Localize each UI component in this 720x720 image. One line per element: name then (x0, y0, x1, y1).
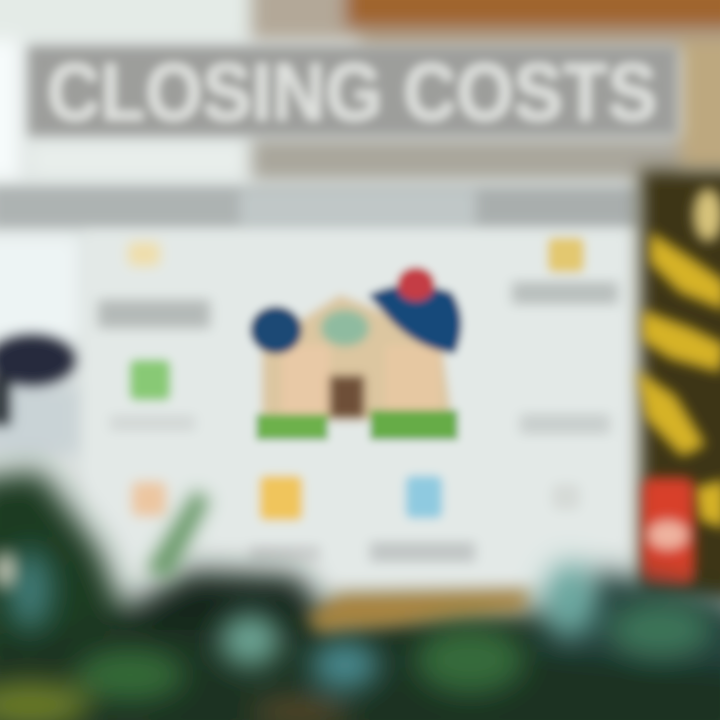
icon: top right yellow marker (548, 238, 584, 272)
text block: lower left label (250, 545, 320, 561)
title: CLOSING COSTS (47, 47, 657, 138)
icon: yellow square (260, 476, 302, 520)
right side: yellow and dark plant (636, 170, 720, 600)
roof right (368, 285, 462, 354)
text block: top left label (98, 300, 210, 328)
text block: top right label (512, 282, 618, 304)
text block: middle left label (110, 415, 195, 431)
title banner (28, 46, 678, 138)
lawn left (256, 414, 328, 440)
text block: middle right label (520, 414, 610, 434)
chimney (397, 267, 435, 301)
icon: green square (130, 360, 170, 400)
house walls (262, 295, 452, 420)
roof left (250, 306, 302, 354)
foreground foliage (0, 470, 720, 720)
wooden shelf edge (305, 590, 530, 634)
left dark object (0, 334, 76, 425)
icon: top left yellow marker (128, 242, 160, 266)
panel: infographic board (85, 232, 637, 582)
icon: blue square (406, 476, 442, 518)
icon: orange marker (132, 482, 166, 516)
red object (642, 478, 694, 586)
house illustration (250, 267, 462, 440)
subheader band (0, 186, 640, 228)
door (330, 376, 364, 418)
lawn right (370, 410, 458, 440)
text block: lower centre label (370, 542, 475, 562)
centre gable (321, 310, 369, 346)
icon: pale marker (552, 484, 580, 510)
